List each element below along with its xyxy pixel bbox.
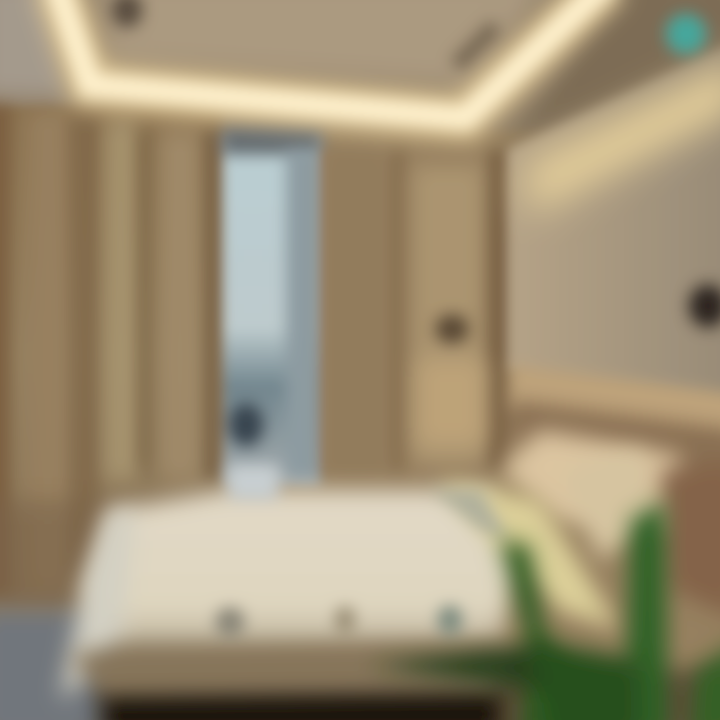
curtains and panel right of window [320, 150, 510, 480]
bed [60, 465, 520, 700]
window [222, 125, 322, 485]
ceiling [0, 0, 720, 145]
curtains left [0, 105, 222, 610]
teal badge [666, 14, 706, 54]
floor [0, 610, 720, 720]
right wall [508, 40, 720, 490]
plant [370, 500, 720, 720]
ceiling cove light [55, 0, 610, 118]
pillows and duvet [430, 430, 720, 630]
